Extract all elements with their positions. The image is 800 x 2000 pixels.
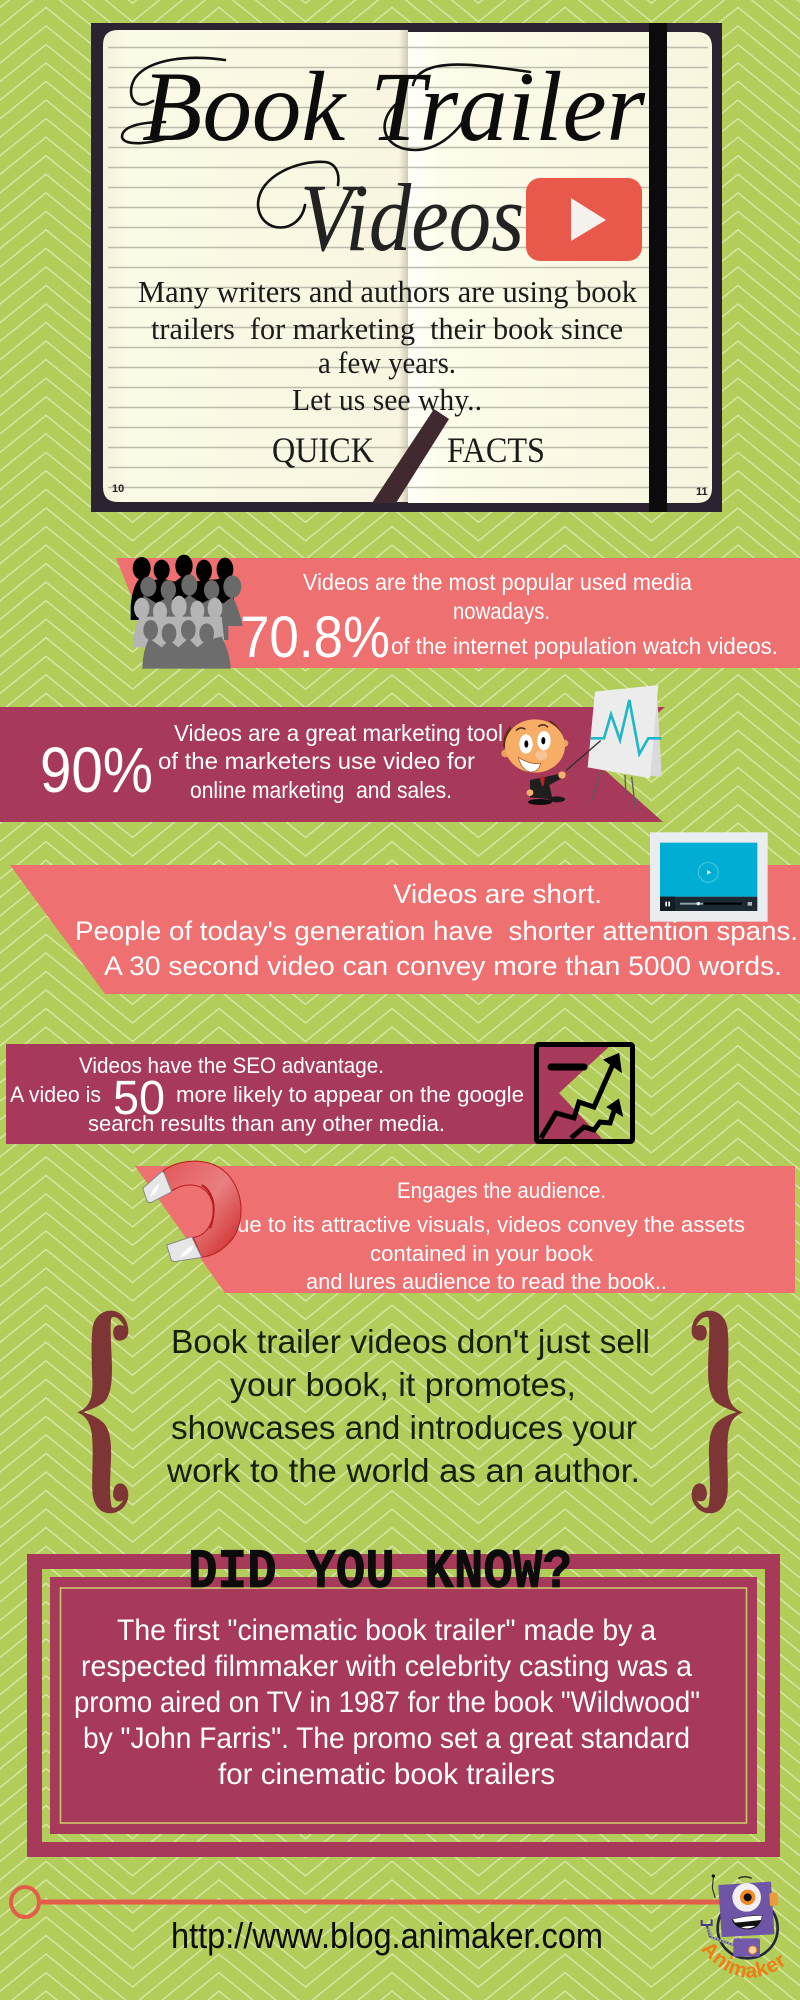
intro text: Let us see why.. — [292, 382, 482, 417]
panel: engages the audience banner — [135, 1161, 795, 1294]
title: Book Trailer Videos: Videos — [300, 164, 524, 271]
quote text: your book, it promotes, — [230, 1366, 576, 1403]
banner shape — [116, 558, 800, 668]
right brace — [692, 1311, 743, 1513]
quick facts label — [272, 430, 545, 470]
banner text: A video is — [10, 1082, 101, 1107]
elastic band — [649, 23, 667, 512]
body text: for cinematic book trailers — [218, 1758, 555, 1791]
quick facts label: QUICK — [272, 430, 374, 470]
banner text: 70.8% — [240, 605, 390, 670]
icon: crowd of people — [131, 555, 243, 669]
panel: videos are short banner — [10, 832, 800, 994]
banner text: more likely to appear on the google — [176, 1082, 524, 1107]
banner text: 90% — [40, 734, 153, 806]
banner text: nowadays. — [453, 598, 550, 624]
banner text: search results than any other media. — [88, 1111, 445, 1136]
thin inner border — [60, 1588, 746, 1823]
banner text: Videos are a great marketing tool — [174, 720, 503, 746]
banner text: and lures audience to read the book.. — [306, 1269, 667, 1294]
banner text: 50 — [113, 1072, 165, 1125]
man head — [501, 749, 509, 757]
banner text: Videos are the most popular used media — [303, 569, 692, 595]
banner shape — [135, 1166, 795, 1293]
pointer — [566, 741, 601, 771]
title flourishes — [122, 58, 530, 227]
quote text: Book trailer videos don't just sell — [171, 1323, 650, 1360]
panel: marketing tool banner — [0, 684, 665, 822]
page numbers: 11 — [696, 486, 708, 498]
icon: magnet — [143, 1161, 241, 1262]
panel: did you know — [27, 1540, 780, 1857]
intro text: a few years. — [318, 345, 456, 380]
banner shape — [6, 1044, 612, 1144]
banner text: of the internet population watch videos. — [391, 633, 778, 659]
quote text: showcases and introduces your — [171, 1409, 637, 1446]
icon: play button — [526, 178, 642, 261]
easel legs — [591, 772, 636, 813]
page numbers — [112, 483, 708, 498]
banner text — [10, 1053, 524, 1136]
banner shape — [10, 865, 800, 994]
footer timeline line with ring — [11, 1887, 722, 1917]
banner text: Videos have the SEO advantage. — [79, 1053, 384, 1078]
title: Book Trailer Videos — [142, 51, 646, 271]
icon: presenter with chart — [501, 684, 662, 813]
panel: most popular media banner — [116, 555, 800, 670]
banner text: People of today's generation have shorter attention spans. — [75, 916, 798, 946]
icon: Animaker robot mascot — [700, 1874, 784, 1978]
banner text: contained in your book — [370, 1241, 594, 1266]
outer frame — [27, 1554, 780, 1857]
banner shape — [0, 707, 665, 822]
notebook pages — [103, 30, 712, 503]
flip chart board — [650, 684, 662, 777]
intro text: trailers for marketing their book since — [151, 311, 623, 346]
quick facts label: FACTS — [447, 430, 545, 470]
body text: The first "cinematic book trailer" made by a — [117, 1614, 656, 1647]
body text: respected filmmaker with celebrity casting was a — [81, 1650, 692, 1683]
icon: video player — [650, 832, 768, 922]
intro text — [138, 274, 637, 417]
quote text: work to the world as an author. — [166, 1452, 640, 1489]
panel: pull quote — [77, 1311, 743, 1513]
man body — [530, 774, 562, 799]
body text: promo aired on TV in 1987 for the book "Wildwood" — [74, 1686, 700, 1719]
body text: by "John Farris". The promo set a great standard — [83, 1722, 690, 1755]
bookmark ribbon — [372, 409, 449, 503]
banner text: of the marketers use video for — [158, 748, 475, 774]
banner text: A 30 second video can convey more than 5000 words. — [104, 951, 782, 981]
banner text — [75, 879, 798, 981]
notebook cover — [91, 23, 722, 512]
icon: growth chart — [536, 1044, 632, 1142]
chart pulse line — [591, 700, 662, 754]
title: Book Trailer Videos: Book Trailer — [142, 51, 646, 162]
quote text — [166, 1323, 650, 1489]
banner text: Videos are short. — [393, 879, 602, 909]
inner box — [50, 1577, 757, 1834]
banner text — [40, 720, 503, 806]
banner text: Due to its attractive visuals, videos convey the assets — [221, 1212, 745, 1237]
banner text — [221, 1178, 745, 1294]
left brace — [77, 1311, 128, 1513]
panel: open notebook header — [91, 23, 722, 512]
banner text — [240, 569, 778, 670]
panel: SEO advantage banner — [6, 1044, 632, 1144]
banner text: Engages the audience. — [397, 1178, 606, 1203]
intro text: Many writers and authors are using book — [138, 274, 637, 309]
body text — [74, 1614, 700, 1791]
footer url: http://www.blog.animaker.com — [171, 1915, 603, 1956]
page numbers: 10 — [112, 483, 124, 495]
animaker curved label: Animaker — [701, 1944, 784, 1978]
heading: did you know: DID YOU KNOW? — [188, 1540, 572, 1604]
banner text: online marketing and sales. — [190, 777, 452, 803]
